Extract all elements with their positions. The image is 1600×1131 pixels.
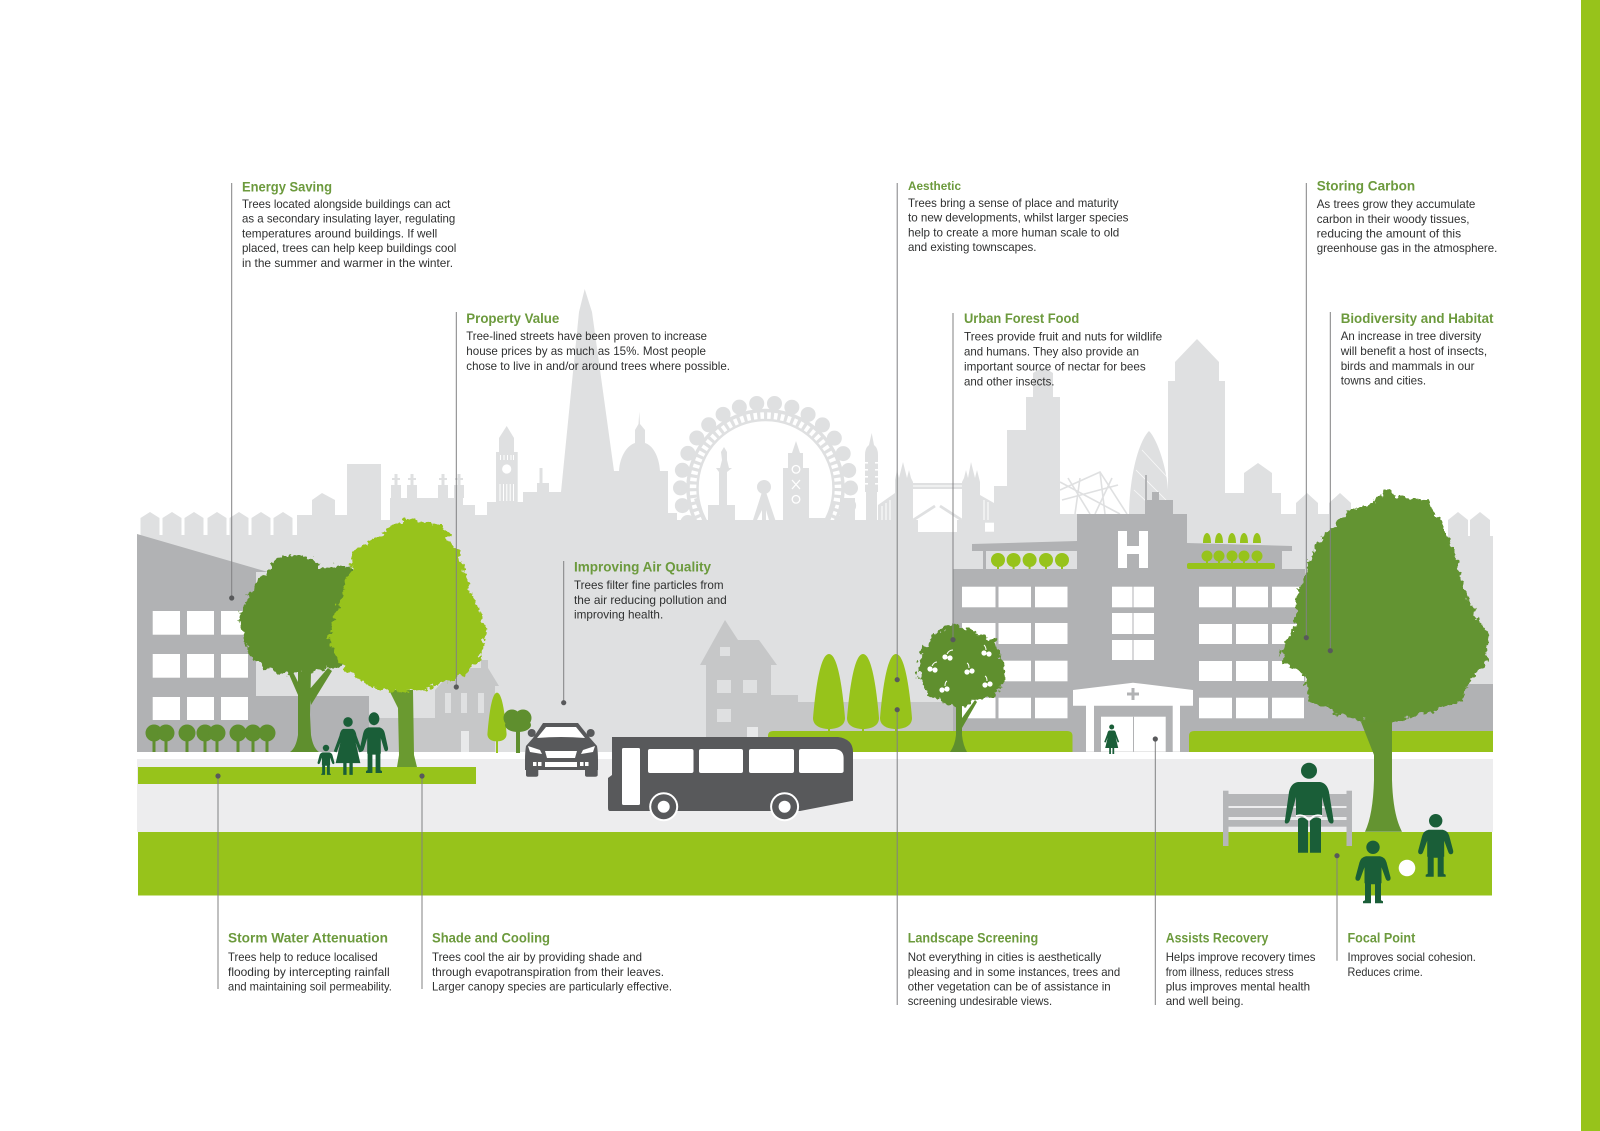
- left office building: [137, 534, 435, 752]
- text: Shade and Cooling: through evapotranspiration from their leaves.: [432, 965, 664, 979]
- text: Energy Saving: temperatures around buildings. If well: [242, 226, 437, 240]
- text: Assists Recovery: plus improves mental health: [1166, 980, 1310, 994]
- BT tower slots: [865, 462, 878, 485]
- text: Biodiversity and Habitat: towns and cities.: [1341, 374, 1426, 388]
- leader line: Improving Air Quality: [561, 561, 566, 705]
- leader line: Storing Carbon: [1304, 183, 1309, 640]
- leader line: Shade and Cooling: [419, 773, 425, 989]
- leader line: Focal Point: [1334, 853, 1340, 961]
- text: Storing Carbon: greenhouse gas in the atmosphere.: [1317, 241, 1497, 255]
- text: Aesthetic: Aesthetic: [908, 179, 961, 193]
- text: Aesthetic: Trees bring a sense of place and maturity: [908, 196, 1119, 210]
- text: Shade and Cooling: Shade and Cooling: [432, 930, 550, 946]
- monument column: [708, 447, 735, 522]
- hospital H sign: [1118, 531, 1148, 568]
- family: [318, 712, 388, 775]
- small white window: [985, 523, 994, 532]
- hospital windows: [962, 587, 1304, 718]
- text: Energy Saving: in the summer and warmer in the winter.: [242, 256, 453, 270]
- text: Energy Saving: as a secondary insulating layer, regulating: [242, 212, 455, 226]
- hospital: [953, 475, 1493, 752]
- text: Storm Water Attenuation: Trees help to reduce localised: [228, 950, 378, 964]
- pavement strip: [137, 752, 1493, 759]
- leader line: Energy Saving: [229, 183, 234, 601]
- text: Landscape Screening: Not everything in cities is aesthetically: [908, 950, 1101, 964]
- right roof garden trees: [1187, 533, 1275, 569]
- ball: [1399, 860, 1415, 876]
- OXO windows: [792, 466, 800, 503]
- text: Biodiversity and Habitat: [1340, 311, 1494, 388]
- road: [137, 759, 1493, 832]
- three cypress trees: [813, 654, 912, 733]
- tree: dark green left: [238, 555, 352, 752]
- row of small houses: [140, 512, 292, 535]
- text: Aesthetic: help to create a more human scale to old: [908, 226, 1119, 240]
- text: Improving Air Quality: [574, 560, 727, 622]
- child right: [1418, 814, 1453, 877]
- text: Storing Carbon: [1317, 178, 1497, 255]
- BT tower: [865, 433, 878, 522]
- text: Biodiversity and Habitat: An increase in tree diversity: [1341, 329, 1481, 343]
- car: [525, 723, 598, 777]
- leader line: Property Value: [454, 312, 459, 690]
- text: Landscape Screening: screening undesirable views.: [908, 994, 1052, 1008]
- Tower Bridge opening: [913, 483, 962, 532]
- grey city skyline: [137, 289, 1493, 752]
- green side bar: [1581, 0, 1600, 1131]
- text: Landscape Screening: pleasing and in some instances, trees and: [908, 965, 1120, 979]
- text: Storing Carbon: reducing the amount of this: [1317, 226, 1461, 240]
- text: Assists Recovery: Helps improve recovery times: [1166, 950, 1316, 964]
- small trees row: [146, 724, 276, 752]
- text: Focal Point: Focal Point: [1348, 930, 1416, 946]
- tree: light green large: [329, 518, 486, 767]
- cherries: [927, 645, 993, 693]
- text: Improving Air Quality: Trees filter fine particles from: [574, 578, 724, 592]
- text: Landscape Screening: Landscape Screening: [908, 930, 1038, 946]
- text: Improving Air Quality: the air reducing pollution and: [574, 593, 727, 607]
- text: Property Value: [466, 311, 730, 373]
- OXO tower: [783, 441, 826, 522]
- stadium lattice: [1060, 472, 1127, 514]
- bus: [608, 737, 853, 821]
- text: Aesthetic: [908, 179, 1129, 254]
- leader line: Urban Forest Food: [950, 313, 956, 642]
- text: Energy Saving: Energy Saving: [242, 180, 332, 194]
- text: Storm Water Attenuation: flooding by intercepting rainfall: [228, 965, 390, 979]
- text: Aesthetic: to new developments, whilst larger species: [908, 210, 1129, 224]
- text: Assists Recovery: from illness, reduces stress: [1166, 965, 1294, 979]
- text: Storing Carbon: Storing Carbon: [1317, 178, 1415, 194]
- text: Property Value: house prices by as much as 15%. Most people: [466, 344, 706, 358]
- text: Improving Air Quality: improving health.: [574, 608, 663, 622]
- man on bench: [1285, 763, 1334, 853]
- upper verge: [138, 767, 476, 784]
- London Eye: [680, 403, 850, 573]
- text: Property Value: Tree-lined streets have been proven to increase: [466, 329, 707, 343]
- text: Shade and Cooling: Trees cool the air by providing shade and: [432, 950, 642, 964]
- text: Focal Point: Improves social cohesion.: [1348, 950, 1476, 964]
- text: Shade and Cooling: [432, 930, 672, 994]
- house behind bus: [700, 620, 953, 752]
- text: Property Value: Property Value: [466, 311, 560, 326]
- cherry tree: [918, 624, 1005, 752]
- hedges: [768, 731, 1493, 752]
- leader line: Biodiversity: [1328, 312, 1333, 653]
- text: Storing Carbon: carbon in their woody tissues,: [1317, 212, 1470, 226]
- gherkin streaks: [1134, 450, 1168, 514]
- text: Property Value: chose to live in and/or around trees where possible.: [466, 359, 730, 373]
- text: Urban Forest Food: Urban Forest Food: [964, 311, 1079, 326]
- text: Biodiversity and Habitat: birds and mammals in our: [1341, 359, 1475, 373]
- text: Urban Forest Food: important source of nectar for bees: [964, 360, 1146, 374]
- bus wheels: [649, 792, 799, 821]
- figure at hospital door: [1104, 724, 1119, 754]
- left bridge cable: [878, 493, 895, 522]
- bench: [1223, 791, 1352, 846]
- right bridge cable: [980, 495, 994, 522]
- text: Storm Water Attenuation: Storm Water Attenuation: [228, 930, 388, 946]
- left roof garden trees: [991, 553, 1069, 569]
- leader line: Landscape Screening: [895, 707, 900, 1005]
- text: Landscape Screening: [908, 930, 1120, 1008]
- text: Landscape Screening: other vegetation can be of assistance in: [908, 980, 1111, 994]
- office windows: [153, 611, 248, 720]
- terraced house behind trees: [435, 660, 499, 752]
- lower grass: [138, 832, 1492, 896]
- text: Improving Air Quality: Improving Air Quality: [574, 560, 711, 574]
- low wall right: [1300, 684, 1493, 752]
- leader line: Aesthetic: [895, 183, 900, 682]
- text: Urban Forest Food: [964, 311, 1163, 388]
- hospital entrance porch: [1073, 683, 1193, 752]
- ball spire: [753, 480, 780, 534]
- wheel legs: [694, 498, 836, 530]
- text: Energy Saving: placed, trees can help keep buildings cool: [242, 241, 456, 255]
- text: Biodiversity and Habitat: will benefit a host of insects,: [1340, 344, 1487, 358]
- text: Urban Forest Food: and humans. They also provide an: [964, 344, 1139, 358]
- text: Biodiversity and Habitat: Biodiversity and Habitat: [1341, 311, 1494, 326]
- hospital body: [953, 492, 1305, 752]
- text: Assists Recovery: [1166, 930, 1316, 1008]
- big tree: [1281, 490, 1490, 832]
- bridge cable stripes: [882, 500, 988, 520]
- text: Assists Recovery: Assists Recovery: [1166, 930, 1269, 946]
- Big Ben details: [500, 455, 514, 501]
- text: Urban Forest Food: Trees provide fruit and nuts for wildlife: [964, 330, 1163, 344]
- text: Aesthetic: and existing townscapes.: [908, 240, 1036, 254]
- block by the wheel: [840, 498, 855, 522]
- castle turrets: [391, 474, 464, 498]
- text: Storm Water Attenuation: [228, 930, 392, 994]
- text: Energy Saving: Trees located alongside buildings can act: [242, 197, 451, 211]
- leader line: Storm Water: [215, 773, 221, 989]
- text: Focal Point: [1348, 930, 1476, 979]
- text: Storm Water Attenuation: and maintaining soil permeability.: [228, 980, 392, 994]
- text: Shade and Cooling: Larger canopy species are particularly effective.: [432, 980, 672, 994]
- text: Assists Recovery: and well being.: [1166, 994, 1244, 1008]
- text: Storing Carbon: As trees grow they accumulate: [1317, 197, 1476, 211]
- child left: [1355, 841, 1391, 903]
- text: Focal Point: Reduces crime.: [1348, 965, 1423, 979]
- text: Energy Saving: [242, 180, 456, 270]
- small cypress and tree: [487, 693, 532, 753]
- leader line: Assists Recovery: [1153, 736, 1158, 1005]
- text: Urban Forest Food: and other insects.: [964, 374, 1054, 388]
